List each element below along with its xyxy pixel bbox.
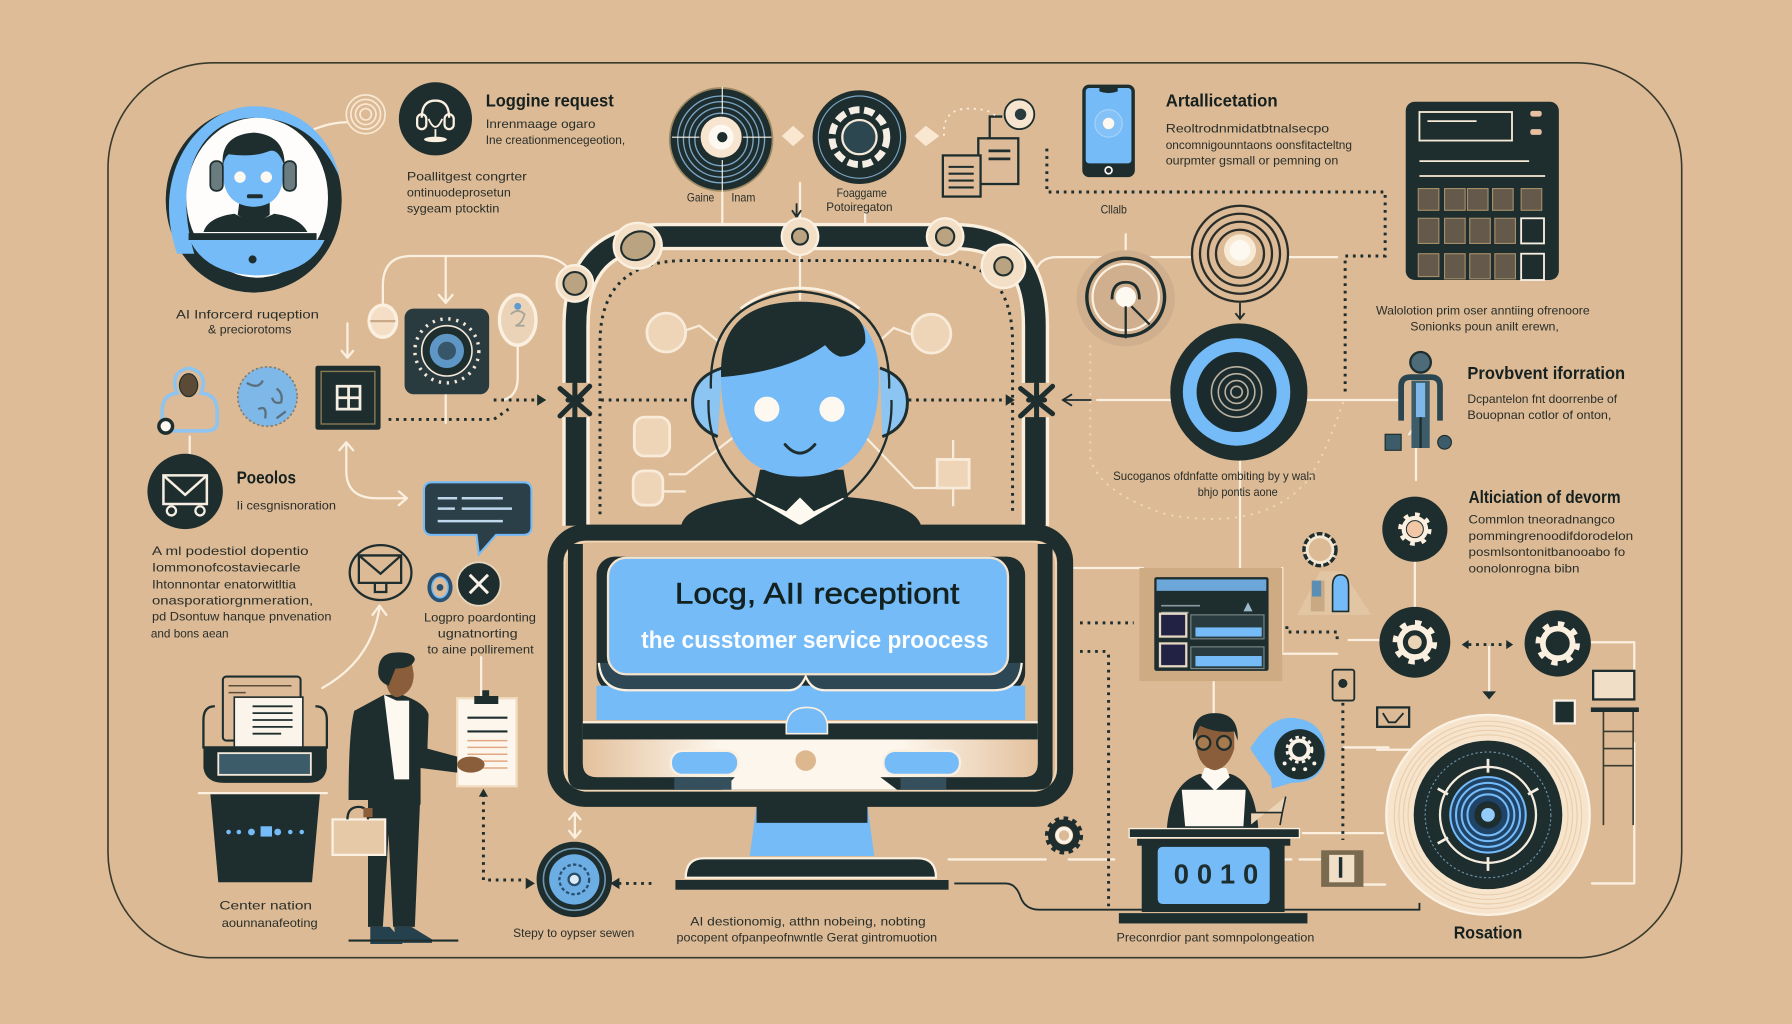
text: aperture caption: Foaggame [837,186,887,200]
text: intelligent computer note: ontinuodeprosetun [407,186,511,200]
text: logging note: to aine pollirement [427,643,534,657]
icon: mail badge [350,545,411,600]
text: provident body: Bouopnan cotlor of onton, [1467,408,1611,422]
icon: user [159,368,217,433]
avatar head [223,134,283,207]
heading: logging request: Loggine request [486,90,614,110]
clipboard [457,698,517,786]
text: AI reception caption: AI Inforcerd ruqeption [176,307,319,321]
icon: camera dot [1005,99,1034,129]
icon: close circle [457,562,501,606]
icons: gear circles [1379,497,1591,678]
icon: pill badge [499,295,536,345]
text: pooling paragraph: Iommonofcostaviecarle [152,560,301,574]
shoulders [681,470,921,526]
avatar monitor [190,240,325,275]
icon: left knot [560,384,590,421]
icon: small gear [1047,818,1081,853]
text: center notation caption: aounnanafeoting [222,916,318,930]
laptop [1182,790,1246,826]
legs [368,789,421,927]
figure: robot agent head [681,288,921,526]
connectors: solid arrows and base line [792,203,1419,910]
figure: receptionist at desk [1119,713,1307,923]
icon: target [427,573,453,602]
heading: application of devorm: Alticiation of devorm [1469,487,1621,507]
avatar ring [166,107,342,293]
subtitle: the cusstomer service proocess [641,627,989,654]
screen [597,557,1025,691]
text: center notation caption: Center nation [219,899,312,913]
connectors: dotted flow lines [389,149,1591,906]
text: provident body: Dcpantelon fnt doorrenbe of [1467,392,1618,406]
icon: right knot [1021,384,1053,421]
desk [1129,829,1299,838]
text: pooling paragraph: and bons aean [151,627,229,641]
monitor body [555,533,1065,799]
band [583,721,1038,723]
base [686,858,936,878]
text: resolution label: Rosation [1454,922,1522,942]
icon: big lens [1170,323,1307,461]
icon: fingerprint [346,95,385,134]
icon: small monitor stand [1554,671,1639,825]
text: logging note: ugnatnorting [438,627,518,641]
small cream icons around the head [633,313,969,505]
icon: processor tile [405,309,489,394]
text: phone caption: Cllalb [1101,203,1127,217]
icon: document bin [199,677,327,882]
title: Locg, AII receptiont [675,577,960,610]
icon: calculator keypad [1406,102,1559,280]
icon: concentric radar [1192,206,1288,302]
text: intelligent computer note: sygeam ptocktin [407,202,499,216]
text: AI reception caption: & preciorotoms [208,323,291,337]
text: authentication body: oncomnigounntaons oonsfitacteltng [1166,138,1352,152]
icon: aperture disc [813,90,906,184]
icon: phone [1082,85,1135,177]
panel: main rounded frame [108,63,1682,958]
ear cups [693,368,722,437]
stand [750,806,874,856]
monitor inner frame [568,544,1053,790]
desk readout: 0010 [1174,858,1258,889]
text: aperture caption: Potoiregaton [826,200,893,214]
icon: gear with bell [1297,534,1371,615]
pale dotted loop [1090,345,1344,519]
shirt [384,695,409,779]
text: monitor caption: AI destionomig, atthn nobeing, nobting [690,915,926,929]
body [1167,774,1258,829]
text: step caption: Stepy to oypser sewen [513,926,634,940]
text: lens caption: bhjo pontis aone [1198,485,1278,499]
text: intelligent computer note: Poallitgest congrter [407,170,527,184]
icons: connector diamonds [782,126,939,146]
icon: headset circle [399,82,472,155]
face [721,302,879,477]
briefcase [333,819,385,855]
icons: small device tags [1321,670,1409,887]
icon: dotted arc [944,109,998,136]
icon: globe [238,367,297,426]
heading: authentication: Artallicetation [1166,90,1278,110]
text: authentication body: ourpmter gsmall or pemning on [1166,154,1338,168]
text: receptionist caption: Preconrdior pant somnpolongeation [1117,931,1314,945]
text: logging request body: Ine creationmencegeotion, [486,133,625,147]
collar [754,497,846,525]
buttons [671,751,738,775]
panel: central monitor [555,533,1065,890]
avatar body [203,214,307,232]
text: validation note: Walolotion prim oser anntiing ofrenoore [1376,303,1590,317]
icon: documents [943,117,1018,197]
text: application body: posmlsontonitbanooabo fo [1469,545,1625,559]
arrowheads [479,394,1513,889]
text: disc caption: Gaine [687,191,715,205]
text: pooling paragraph: onasporatiorgnmeration, [152,594,313,608]
icon: dial ring [1077,250,1175,346]
eyes [754,397,779,422]
icon: target scanner [537,842,612,917]
headband [711,291,889,389]
text: pooling subtitle: Ii cesgnisnoration [237,499,336,513]
text: disc caption: Inam [731,191,755,205]
text: logging note: Logpro poardonting [424,611,536,625]
text: pooling paragraph: A ml podestiol dopentio [152,544,309,558]
heading: provident information: Provbvent iforration [1467,363,1625,383]
text: application body: pommingrenoodifdorodelon [1469,529,1633,543]
smile [785,445,815,453]
icon: windows tile [315,366,381,430]
connectors: cream lines [190,122,1634,885]
text: logging request body: Inrenmaage ogaro [486,117,596,131]
icon: gear speech bubble [1250,718,1326,789]
icon: concentric disc [670,87,773,192]
heading: pooling: Poeolos [237,467,296,487]
text: monitor caption: pocopent ofpanpeofnwntle Gerat gintromuotion [677,931,937,945]
icon: small badge [369,305,397,337]
icon: chat bubble [424,482,531,554]
text: pooling paragraph: pd Dsontuw hanque pnvenation [152,610,331,624]
icon: fingerprint resolution dial [1386,715,1590,915]
panel: dashboard [1139,568,1282,681]
text: application body: oonolonrogna bibn [1469,562,1579,576]
head [385,661,414,697]
text: lens caption: Sucoganos ofdnfatte ombiting by y waln [1113,469,1315,483]
text: application body: Commlon tneoradnangco [1469,512,1615,526]
arch nodes [557,218,1025,302]
arch frame [557,218,1053,526]
icon: person figure [1385,352,1451,450]
hair [721,302,865,377]
text: pooling paragraph: Ihtonnontar enatorwitltia [152,578,296,592]
jacket [349,695,457,805]
icon: mail circle [147,454,223,529]
shoes [370,927,432,944]
figure: businessman handing clipboard [333,652,517,944]
head [1197,718,1234,770]
text: validation note: Sonionks poun anilt erewn, [1410,319,1559,333]
jaw wire [708,400,892,498]
panel: AI avatar [166,106,342,293]
hand [457,757,485,773]
text: authentication body: Reoltrodnmidatbtnalsecpo [1166,122,1330,136]
